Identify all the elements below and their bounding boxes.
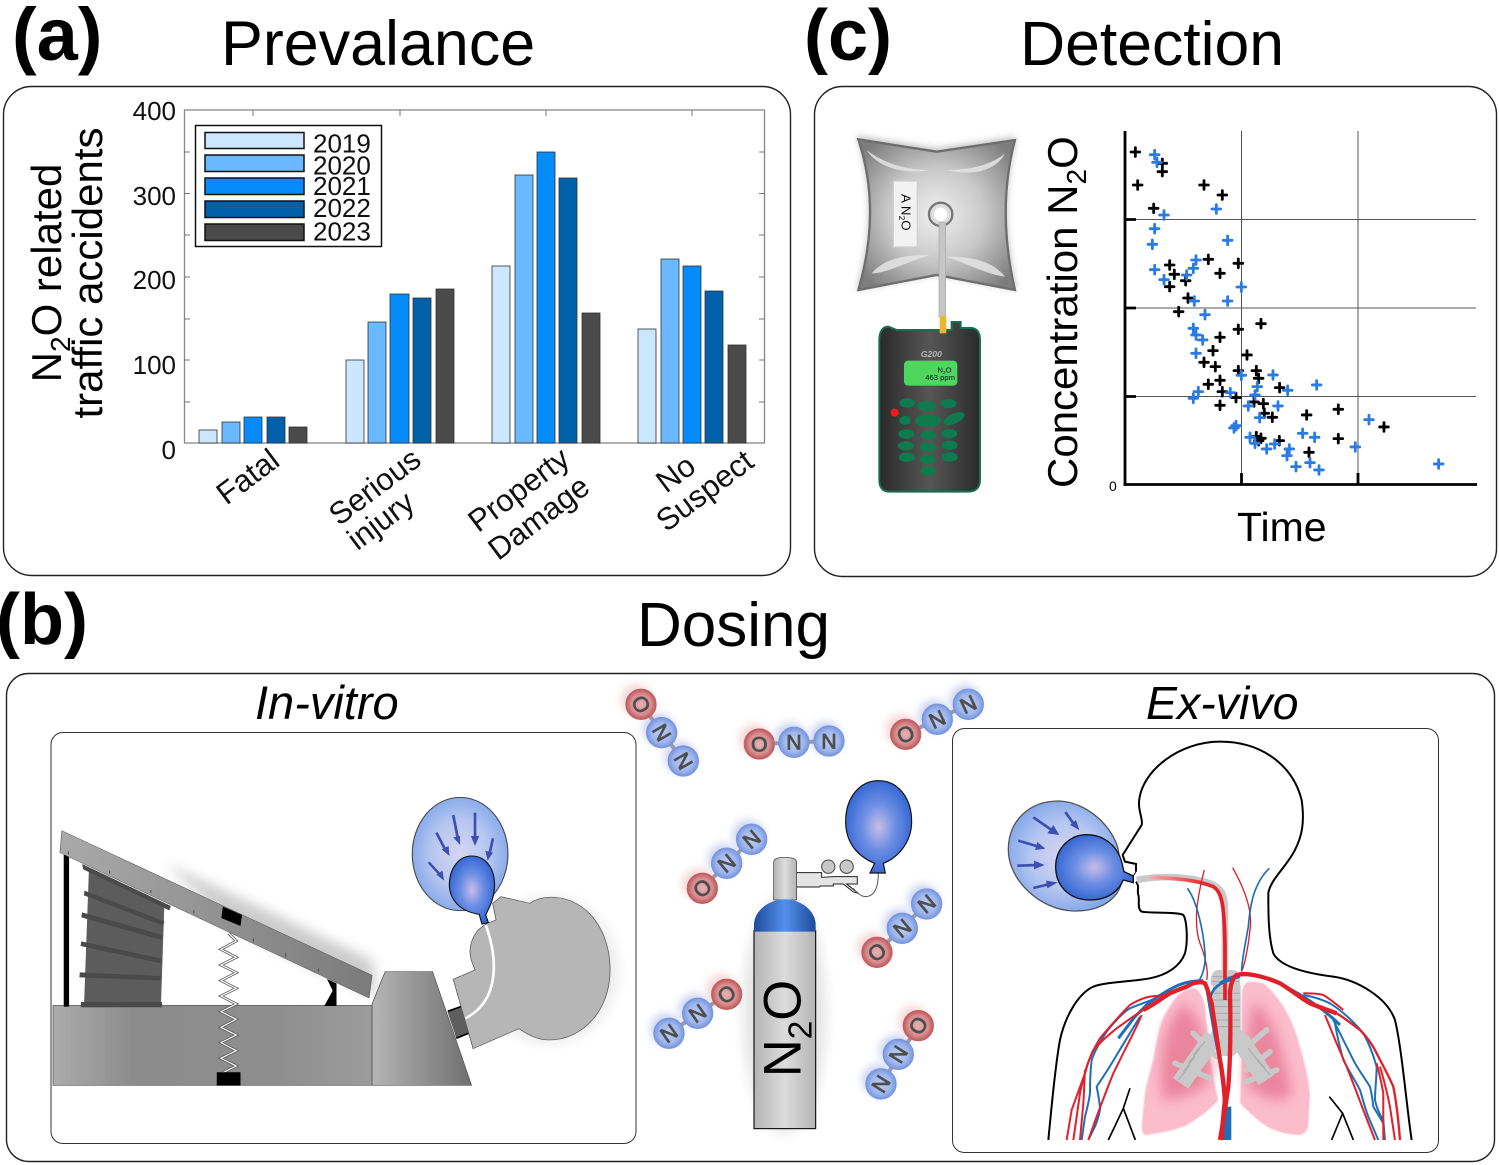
gauges xyxy=(822,860,853,873)
outer gas bag xyxy=(412,797,508,911)
panel: dosing xyxy=(0,580,1494,1162)
illustration: gas bag: O xyxy=(898,220,913,231)
molecule: N xyxy=(786,731,802,755)
illustration: gas bag xyxy=(858,139,1015,317)
filled balloon xyxy=(846,781,912,873)
arrows xyxy=(429,813,493,877)
molecule: N xyxy=(647,720,676,745)
valve arm xyxy=(796,873,858,893)
illustration: N2O gas analyser: 463 ppm xyxy=(925,373,955,382)
tube xyxy=(853,873,878,897)
lung shading xyxy=(1161,1003,1292,1100)
inhaled gas tube xyxy=(1137,877,1225,973)
illustration: N2O gas analyser xyxy=(879,316,980,492)
illustration: gas bag: A N xyxy=(898,194,913,215)
inhaled gas tube colour xyxy=(1150,877,1225,1000)
panel frame c xyxy=(814,86,1496,576)
x axis categories: No xyxy=(649,448,702,500)
x axis categories: Property xyxy=(461,440,576,539)
origin label: 0 xyxy=(1109,478,1117,494)
illustration: N2O gas analyser: 2 xyxy=(943,370,946,376)
x axis categories xyxy=(210,440,760,567)
bellows xyxy=(79,864,171,1007)
molecule: O xyxy=(626,691,655,718)
body outline xyxy=(1048,742,1412,1140)
y axis title: traffic accidents xyxy=(64,127,111,419)
right lung xyxy=(1240,982,1310,1135)
molecule: N xyxy=(656,1019,682,1048)
panel frame a xyxy=(4,86,790,576)
spring mounts xyxy=(217,907,242,1086)
legend xyxy=(196,126,382,246)
illustration: gas bag: 2 xyxy=(897,215,907,220)
scatter points: black xyxy=(1131,148,1388,457)
illustration: N2O gas analyser: O xyxy=(946,366,952,375)
legend: 2020 xyxy=(313,150,371,180)
molecule xyxy=(687,824,767,904)
spring xyxy=(221,933,236,1073)
molecule xyxy=(626,689,699,776)
door seal xyxy=(447,1007,469,1038)
blue vessels xyxy=(1082,975,1385,1140)
arrowheads xyxy=(1034,820,1079,888)
y axis numbers: 400 xyxy=(133,96,176,126)
x axis categories: Serious xyxy=(322,441,427,532)
head xyxy=(453,897,610,1049)
red vessels xyxy=(1067,974,1400,1140)
y axis title xyxy=(23,127,111,419)
illustration: N2O gas analyser: N xyxy=(937,366,943,375)
molecule xyxy=(744,726,844,759)
airway xyxy=(465,925,494,1018)
y axis numbers: 0 xyxy=(162,435,176,465)
arrowheads xyxy=(436,836,493,881)
sub-heading: Ex-vivo: Ex-vivo xyxy=(1146,677,1298,729)
y axis title: 2 xyxy=(1061,169,1092,184)
molecule: N xyxy=(713,849,740,878)
cylinder body xyxy=(754,931,816,1129)
panel frame b xyxy=(6,674,1494,1162)
ramp ticks xyxy=(68,851,319,972)
base block xyxy=(53,1005,372,1085)
bars: Property Damage xyxy=(492,152,600,443)
outer gas bag xyxy=(1008,801,1122,911)
valve neck xyxy=(774,857,797,900)
y axis title: Concentration N xyxy=(1039,184,1086,488)
illustration: human airway and circulation xyxy=(1008,742,1412,1140)
cylinder cap xyxy=(754,899,816,932)
molecule: N xyxy=(925,705,949,734)
ramp lid xyxy=(60,831,372,998)
heading: Dosing: Dosing xyxy=(637,591,830,660)
legend: 2022 xyxy=(313,193,371,223)
molecule xyxy=(890,689,984,750)
illustration: exposure chamber with head xyxy=(53,797,618,1086)
x axis categories: Damage xyxy=(481,468,596,567)
legend: 2023 xyxy=(313,216,371,246)
molecule: O xyxy=(751,732,768,756)
bars: Fatal xyxy=(199,417,307,443)
y axis title: O related xyxy=(23,164,70,336)
sub-panel frame: in-vitro xyxy=(51,732,636,1144)
cylinder label: O xyxy=(753,980,812,1021)
scatter chart xyxy=(1109,131,1477,494)
molecule: N xyxy=(867,1071,896,1097)
y axis numbers: 100 xyxy=(133,350,176,380)
molecule: O xyxy=(688,874,717,903)
bars: Serious injury xyxy=(346,289,454,443)
y axis numbers: 200 xyxy=(133,265,176,295)
bars: No Suspect xyxy=(638,259,746,443)
panel: prevalence xyxy=(4,0,790,576)
left lung xyxy=(1142,988,1218,1135)
x axis categories: injury xyxy=(341,484,421,557)
illustration: nitrous oxide cylinder and balloon xyxy=(626,689,984,1133)
x axis categories: Suspect xyxy=(649,443,760,538)
sub-heading: In-vitro: In-vitro xyxy=(255,676,399,729)
y axis numbers: 300 xyxy=(133,181,176,211)
trachea and bronchi xyxy=(1175,970,1277,1083)
inner balloon xyxy=(449,856,495,924)
cylinder label: N xyxy=(753,1039,812,1077)
molecule: N xyxy=(738,825,765,854)
heading: Prevalance: Prevalance xyxy=(221,9,535,79)
molecule: N xyxy=(956,691,980,719)
scatter points: blue xyxy=(1148,150,1443,474)
arrows xyxy=(1017,812,1073,888)
cylinder label: 2 xyxy=(783,1021,820,1039)
heading: Detection: Detection xyxy=(1020,9,1284,79)
molecule: N xyxy=(669,748,697,774)
molecule xyxy=(862,889,942,968)
molecule xyxy=(654,979,742,1049)
x axis categories: Fatal xyxy=(210,442,286,511)
x axis title: Time xyxy=(1237,504,1327,550)
molecule xyxy=(866,1010,934,1099)
inner balloon xyxy=(1056,835,1133,900)
neck vessels xyxy=(1187,868,1269,980)
sub-panel frame: ex-vivo xyxy=(952,728,1438,1152)
hinge post xyxy=(64,855,69,1007)
legend: 2021 xyxy=(313,171,371,201)
molecule: N xyxy=(821,729,837,753)
molecule: N xyxy=(685,999,711,1028)
molecule: N xyxy=(889,914,916,943)
pedestal xyxy=(372,972,472,1085)
molecule: N xyxy=(884,1042,913,1067)
y axis title: N xyxy=(23,352,70,382)
y axis title: O xyxy=(1039,136,1086,169)
molecule: O xyxy=(863,938,891,967)
y axis title: 2 xyxy=(45,336,76,352)
panel: detection xyxy=(804,0,1496,576)
bar chart xyxy=(184,110,765,443)
rear support xyxy=(324,979,337,1006)
y axis numbers xyxy=(133,96,176,465)
legend: 2019 xyxy=(313,128,371,158)
molecule: O xyxy=(713,980,741,1009)
molecule: O xyxy=(893,720,918,749)
illustration: N2O gas analyser: G200 xyxy=(921,349,942,359)
molecule: O xyxy=(904,1012,933,1039)
molecule: N xyxy=(913,890,940,918)
connector xyxy=(1124,872,1136,876)
armpit lines xyxy=(1108,1088,1353,1140)
